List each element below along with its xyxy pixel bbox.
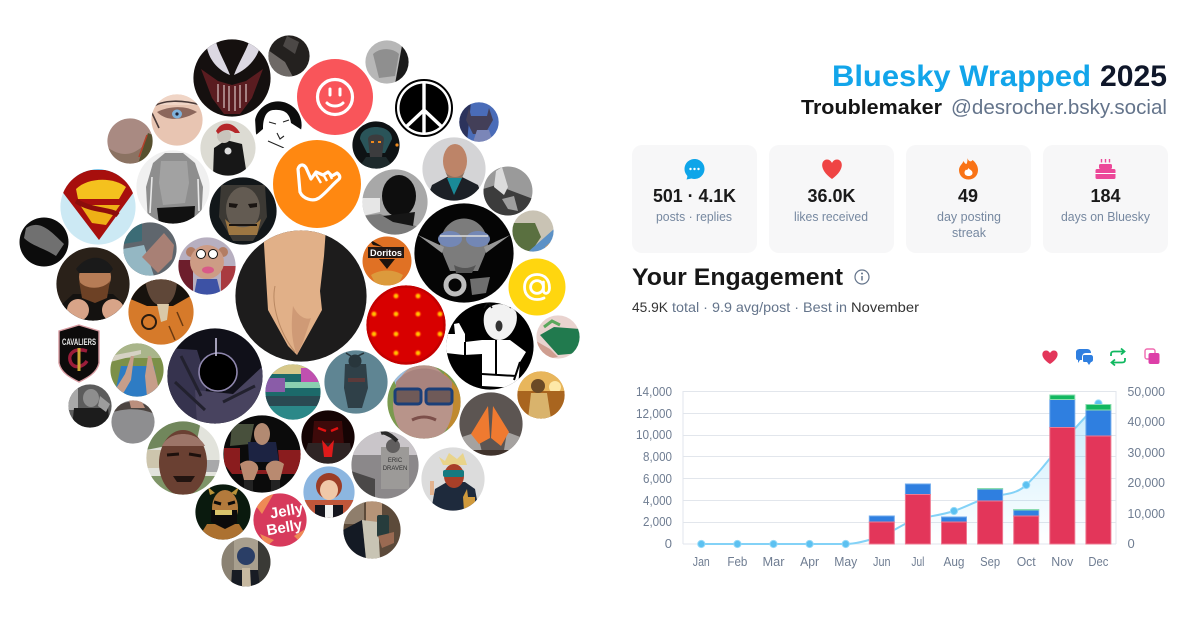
avatar: bald man in jacket <box>422 137 486 201</box>
bars: likes <box>869 428 1111 544</box>
avatar: horror joker <box>209 177 277 245</box>
left axis labels: 10,000 <box>636 427 672 442</box>
panel: day posting streak: 49 <box>958 186 978 206</box>
icon: flame <box>959 158 978 180</box>
avatar: grave stone: ERIC <box>388 458 403 464</box>
icon: cake <box>1096 159 1116 179</box>
icon: orange shaka bubble <box>273 140 361 228</box>
avatar: gray torso statue <box>365 40 409 84</box>
panel: day posting streak: streak <box>952 225 986 240</box>
month labels: Jan <box>693 554 710 569</box>
icon: chat bubble <box>684 159 704 180</box>
panel: likes received <box>769 145 894 253</box>
avatar: doritos bag: Doritos <box>370 248 402 259</box>
panel: day posting streak: day posting <box>937 209 1001 224</box>
icon: yellow mention bubble <box>508 258 566 316</box>
avatar: open shirt chest <box>235 228 367 362</box>
icon: likes legend <box>1042 350 1058 364</box>
panel: posts and replies: posts · replies <box>656 209 732 224</box>
avatar: jelly belly logo <box>253 493 307 547</box>
avatar: peace symbol <box>394 78 454 138</box>
month labels: Mar <box>762 554 785 569</box>
avatar: orange hood <box>128 279 194 345</box>
chart gridlines <box>683 391 1116 544</box>
icon: quotes legend <box>1145 349 1160 364</box>
avatar: grave stone: DRAVEN <box>383 466 407 472</box>
engagement summary: November <box>851 299 919 315</box>
avatar: yoda with sunglasses <box>414 203 514 303</box>
avatar: bearded biker <box>56 247 130 321</box>
avatar: gray fabric photo <box>483 166 533 216</box>
panel: posts and replies <box>632 145 757 253</box>
avatar: hand to face <box>123 222 177 276</box>
left axis labels: 6,000 <box>643 471 672 486</box>
panel: posts and replies: 501 · 4.1K <box>653 186 736 206</box>
right axis labels: 0 <box>1128 536 1135 551</box>
heading: your engagement: Your Engagement <box>632 264 843 291</box>
avatar: venom <box>193 39 271 117</box>
avatar: bald head <box>107 118 153 164</box>
left axis labels: 4,000 <box>643 493 672 508</box>
icon: coral smiley bubble <box>297 59 373 135</box>
month labels: Jul <box>911 554 924 569</box>
avatar bubble cluster <box>19 35 580 587</box>
month labels: Dec <box>1088 554 1109 569</box>
icon: info <box>855 270 869 284</box>
month labels: Apr <box>800 554 820 569</box>
avatar: doritos bag <box>362 236 412 287</box>
panel: days on bluesky: 184 <box>1090 186 1120 206</box>
right axis labels: 20,000 <box>1128 475 1165 490</box>
engagement chart <box>636 384 1165 569</box>
avatar: red led grid <box>366 285 446 365</box>
panel: day posting streak <box>906 145 1031 253</box>
avatar: dark fabric <box>19 217 69 267</box>
user identity <box>801 97 1167 119</box>
avatar: glitch art <box>265 364 321 420</box>
left axis labels: 12,000 <box>636 406 672 421</box>
avatar: bare torso photo <box>136 150 210 224</box>
panel: likes received: 36.0K <box>808 186 856 206</box>
bars: reposts <box>978 395 1111 510</box>
avatar: man with blue glasses <box>387 364 461 444</box>
month labels: May <box>834 554 858 569</box>
avatar: grave stone <box>351 431 419 499</box>
month labels: Aug <box>944 554 964 569</box>
avatar: cartoon mouse <box>178 237 236 295</box>
avatar: dark portrait <box>268 35 310 77</box>
user identity: Troublemaker <box>801 97 942 119</box>
avatar: man sitting on car <box>223 415 301 493</box>
avatar: phone selfie <box>343 501 401 559</box>
avatar: wolf art <box>459 102 499 142</box>
avatar: green nature <box>512 210 554 252</box>
avatar: samurai in mist <box>324 350 388 414</box>
month labels: Jun <box>873 554 891 569</box>
avatar: black helmet <box>362 169 428 235</box>
month labels: Sep <box>980 554 1000 569</box>
left axis labels <box>636 384 672 551</box>
avatar: santa hat portrait <box>200 120 256 176</box>
right axis labels: 40,000 <box>1128 414 1165 429</box>
avatar: jelly belly logo: Belly <box>265 516 304 539</box>
avatar: motorcycle helmet <box>221 537 271 587</box>
avatar: superman shield <box>60 169 136 245</box>
avatar: anime elf <box>303 466 355 518</box>
avatar: man outdoors <box>146 421 220 496</box>
avatar: blue eye <box>151 94 203 146</box>
engagement summary: total · 9.9 avg/post · Best in <box>672 299 847 315</box>
left axis labels: 0 <box>665 536 672 551</box>
avatar: pixel oni <box>195 484 251 540</box>
chart legend icons <box>1042 348 1160 366</box>
left axis labels: 8,000 <box>643 449 672 464</box>
month labels: Feb <box>727 554 747 569</box>
month labels: Oct <box>1017 554 1036 569</box>
month labels: Nov <box>1051 554 1074 569</box>
engagement summary: 45.9K <box>632 299 669 315</box>
avatar: golden field <box>517 371 565 419</box>
right axis labels: 50,000 <box>1128 384 1165 399</box>
title: 2025 <box>1100 60 1167 93</box>
right axis labels <box>1128 384 1165 551</box>
icon: replies legend <box>1076 349 1093 365</box>
month labels <box>693 554 1109 569</box>
engagement summary <box>632 299 919 315</box>
avatar: alien robot <box>352 121 400 169</box>
avatar: cavaliers logo <box>59 325 99 382</box>
panel: days on bluesky <box>1043 145 1168 253</box>
avatar: anime masked man <box>421 447 485 511</box>
avatar: red devil <box>301 410 355 464</box>
bars: replies <box>869 400 1111 522</box>
avatar: jelly belly logo: Jelly <box>269 500 305 522</box>
left axis labels: 2,000 <box>643 514 672 529</box>
avatar: vault boy <box>446 302 534 390</box>
stacked bars <box>869 395 1111 544</box>
title: Bluesky Wrapped <box>832 60 1091 93</box>
right axis labels: 30,000 <box>1128 445 1165 460</box>
icon: heart <box>822 160 842 179</box>
left axis labels: 14,000 <box>636 384 672 399</box>
panel: days on bluesky: days on Bluesky <box>1061 209 1150 224</box>
avatar: cavaliers logo: CAVALIERS <box>62 337 96 347</box>
avatar: gray shirt <box>111 400 155 444</box>
avatar: ink sketch <box>254 101 302 149</box>
user identity: @desrocher.bsky.social <box>951 97 1167 119</box>
cumulative area <box>846 404 1098 544</box>
avatar: orange socks <box>459 392 523 456</box>
avatar: black hole <box>167 328 263 424</box>
cumulative line <box>698 400 1102 548</box>
icon: reposts legend <box>1111 348 1125 366</box>
avatar: legs on towel <box>110 343 164 397</box>
right axis labels: 10,000 <box>1128 506 1165 521</box>
avatar: green shirt hand <box>536 315 580 359</box>
avatar: man black and white <box>68 384 112 428</box>
panel: likes received: likes received <box>794 209 868 224</box>
